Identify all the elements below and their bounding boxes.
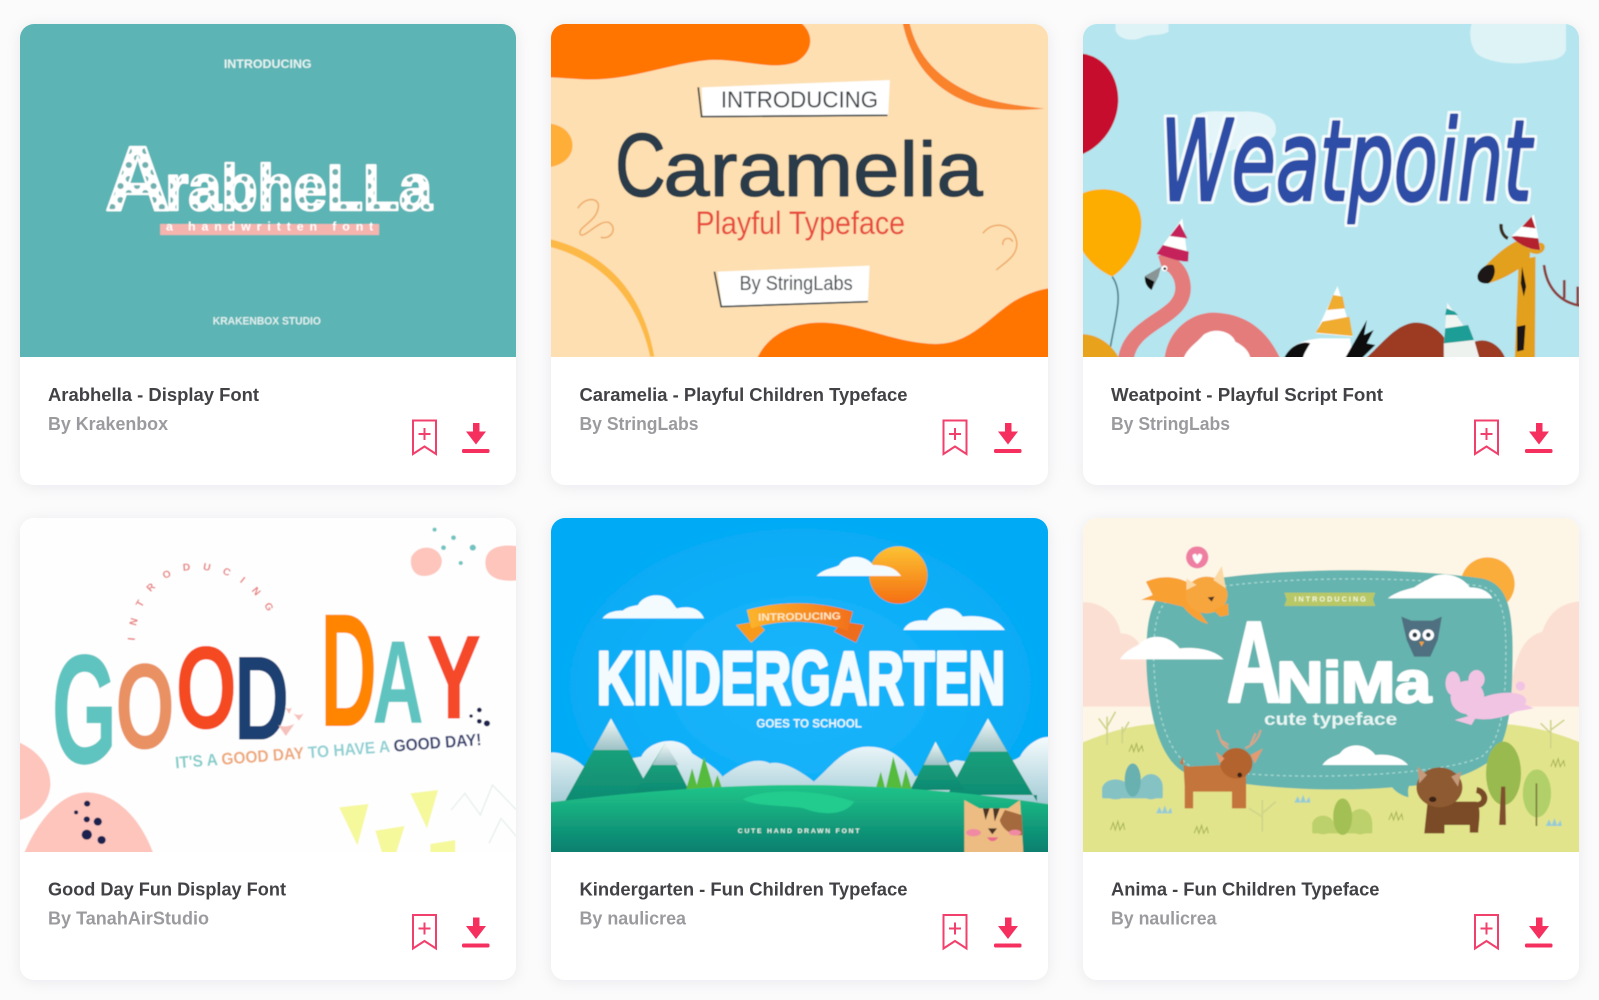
icon: bookmark xyxy=(413,420,436,454)
card author: By StringLabs xyxy=(580,414,698,434)
cover subtitle: Playful Typeface: Playful Typeface xyxy=(696,204,905,241)
card background xyxy=(1083,518,1579,980)
card image: Good Day cover xyxy=(20,527,516,852)
pink bunny xyxy=(1446,670,1534,725)
cover text: introducing: INTRODUCING xyxy=(224,57,312,71)
cover footer text: CUTE HAND DRAWN FONT xyxy=(738,828,860,835)
card image: Caramelia cover xyxy=(547,20,1054,360)
grass tufts xyxy=(1110,744,1565,833)
panel: Caramelia font card xyxy=(547,20,1054,485)
card author: By TanahAirStudio xyxy=(48,908,209,928)
cover subtitle: a handwritten font xyxy=(166,220,373,234)
icon: bookmark xyxy=(944,420,966,454)
panel: Anima font card xyxy=(1077,513,1586,980)
card author: By Krakenbox xyxy=(48,414,168,434)
hearts xyxy=(278,707,304,736)
cover title: Good: O xyxy=(176,622,237,754)
light orange half circle xyxy=(551,123,573,168)
cover subtitle: GOES TO SCHOOL xyxy=(756,716,862,730)
card image: Kindergarten cover xyxy=(547,513,1054,857)
panel: Kindergarten font card xyxy=(547,513,1054,980)
card title: Anima - Fun Children Typeface xyxy=(1111,880,1380,900)
icon: download xyxy=(994,423,1022,453)
cover title: Day: Y xyxy=(426,610,481,744)
trees xyxy=(1486,742,1551,826)
antlers xyxy=(1544,265,1583,306)
icon: bookmark xyxy=(1475,915,1498,948)
leafy plants xyxy=(1099,712,1564,832)
grass path xyxy=(743,791,854,813)
fir trees xyxy=(686,757,912,790)
pale zigzags xyxy=(451,785,517,843)
sun xyxy=(869,546,927,604)
icon: bookmark xyxy=(1475,420,1498,454)
cover title: Day: A xyxy=(373,616,424,748)
cover title: Good: D xyxy=(234,631,289,765)
white clouds xyxy=(603,557,1005,630)
icon: download xyxy=(462,423,490,453)
cat mascot xyxy=(964,800,1023,853)
sky clouds xyxy=(1116,20,1566,153)
card background xyxy=(1083,24,1579,485)
background clouds xyxy=(547,737,1054,810)
card title: Weatpoint - Playful Script Font xyxy=(1111,385,1383,405)
card title: Kindergarten - Fun Children Typeface xyxy=(580,880,908,900)
cover title: Anima: A xyxy=(1227,598,1281,727)
card title: Caramelia - Playful Children Typeface xyxy=(580,385,908,405)
deer xyxy=(1180,730,1263,808)
card image: Arabhella cover xyxy=(17,20,520,360)
green bushes xyxy=(1312,798,1372,835)
card image: Anima cover xyxy=(1077,513,1586,857)
cover title: Good: G xyxy=(52,622,117,797)
flying orange cat xyxy=(1141,566,1229,624)
teal dots xyxy=(433,528,476,565)
card background xyxy=(20,24,516,485)
icon: download xyxy=(994,918,1022,948)
red balloon xyxy=(1083,53,1119,154)
cover title: Anima: NiMa xyxy=(1276,651,1432,715)
icon: bookmark xyxy=(413,915,436,948)
flamingo xyxy=(1126,218,1281,360)
cover subtitle strip xyxy=(160,224,379,235)
pink shapes xyxy=(17,545,520,853)
card author: By naulicrea xyxy=(580,908,687,928)
green ground xyxy=(547,785,1054,857)
card title: Arabhella - Display Font xyxy=(48,385,259,405)
navy dots xyxy=(74,708,490,844)
dashed stitching xyxy=(1154,579,1506,776)
ribbon text: INTRODUCING xyxy=(758,611,841,624)
cover title: Arabhella: rabheLLa xyxy=(165,152,433,225)
yellow triangles xyxy=(339,790,455,853)
cover title: Caramelia: aramelia xyxy=(663,126,984,213)
teal bushes xyxy=(1102,763,1163,799)
yellow balloon xyxy=(1077,189,1141,277)
panel: Weatpoint font card xyxy=(1077,20,1586,485)
squiggles xyxy=(578,200,1017,270)
card title: Good Day Fun Display Font xyxy=(48,880,286,900)
cover tagline: IT'S A GOOD DAY TO HAVE A GOOD DAY! xyxy=(174,730,482,772)
ground creature xyxy=(1083,334,1119,357)
arc text: introducing: INTRODUCING xyxy=(127,562,274,640)
by StringLabs label xyxy=(717,266,870,306)
card image: Caramelia cover: By StringLabs xyxy=(739,272,853,295)
icon: download xyxy=(1525,918,1552,948)
cover title: Good xyxy=(54,645,287,766)
chalk strokes xyxy=(547,22,1044,357)
cover title: Caramelia xyxy=(617,132,984,198)
icon: download xyxy=(462,918,490,948)
zebra with party hat xyxy=(1283,286,1375,360)
mountains xyxy=(564,718,1037,803)
brown dog xyxy=(1416,767,1484,833)
cover title: Arabhella xyxy=(105,145,434,213)
giraffe xyxy=(1477,214,1545,360)
sun xyxy=(1461,557,1515,611)
balloon string xyxy=(1110,277,1118,347)
orange blobs xyxy=(547,20,1050,360)
cover title: Day: D xyxy=(320,579,377,760)
panel: Arabhella font card xyxy=(17,20,520,485)
cover title: Anima xyxy=(1227,598,1432,727)
card author: By StringLabs xyxy=(1111,414,1230,434)
introducing banner xyxy=(1284,593,1375,606)
cover subtitle: cute typeface xyxy=(1264,709,1398,729)
icon: bookmark xyxy=(944,915,966,948)
banner text: INTRODUCING xyxy=(1294,594,1366,603)
cover title: Caramelia: C xyxy=(615,116,666,216)
green hill xyxy=(1077,723,1586,857)
cover studio name: KRAKENBOX STUDIO xyxy=(213,316,321,328)
pink clouds xyxy=(1077,601,1586,707)
introducing label xyxy=(702,80,890,117)
icon: download xyxy=(1525,423,1552,453)
teal speech bubble xyxy=(1146,570,1513,797)
card author: By naulicrea xyxy=(1111,908,1217,928)
heart bubble xyxy=(1186,546,1208,568)
white clouds xyxy=(1120,575,1492,765)
card image: Caramelia cover: INTRODUCING xyxy=(721,86,878,112)
card image: Weatpoint cover xyxy=(1077,20,1586,360)
blue tufts xyxy=(1156,795,1562,826)
card background xyxy=(551,24,1048,485)
cover title: Arabhella: A xyxy=(105,126,170,230)
panel: Good Day font card xyxy=(20,527,516,982)
teal party hat xyxy=(1444,303,1480,360)
ribbon banner xyxy=(736,603,864,643)
owl xyxy=(1401,617,1442,657)
cover title: Good: O xyxy=(115,639,175,775)
card background xyxy=(551,518,1048,980)
brown animal xyxy=(1364,323,1506,360)
cover title: Kindergarten: KINDERGARTEN xyxy=(597,637,1005,721)
card background xyxy=(20,518,516,980)
